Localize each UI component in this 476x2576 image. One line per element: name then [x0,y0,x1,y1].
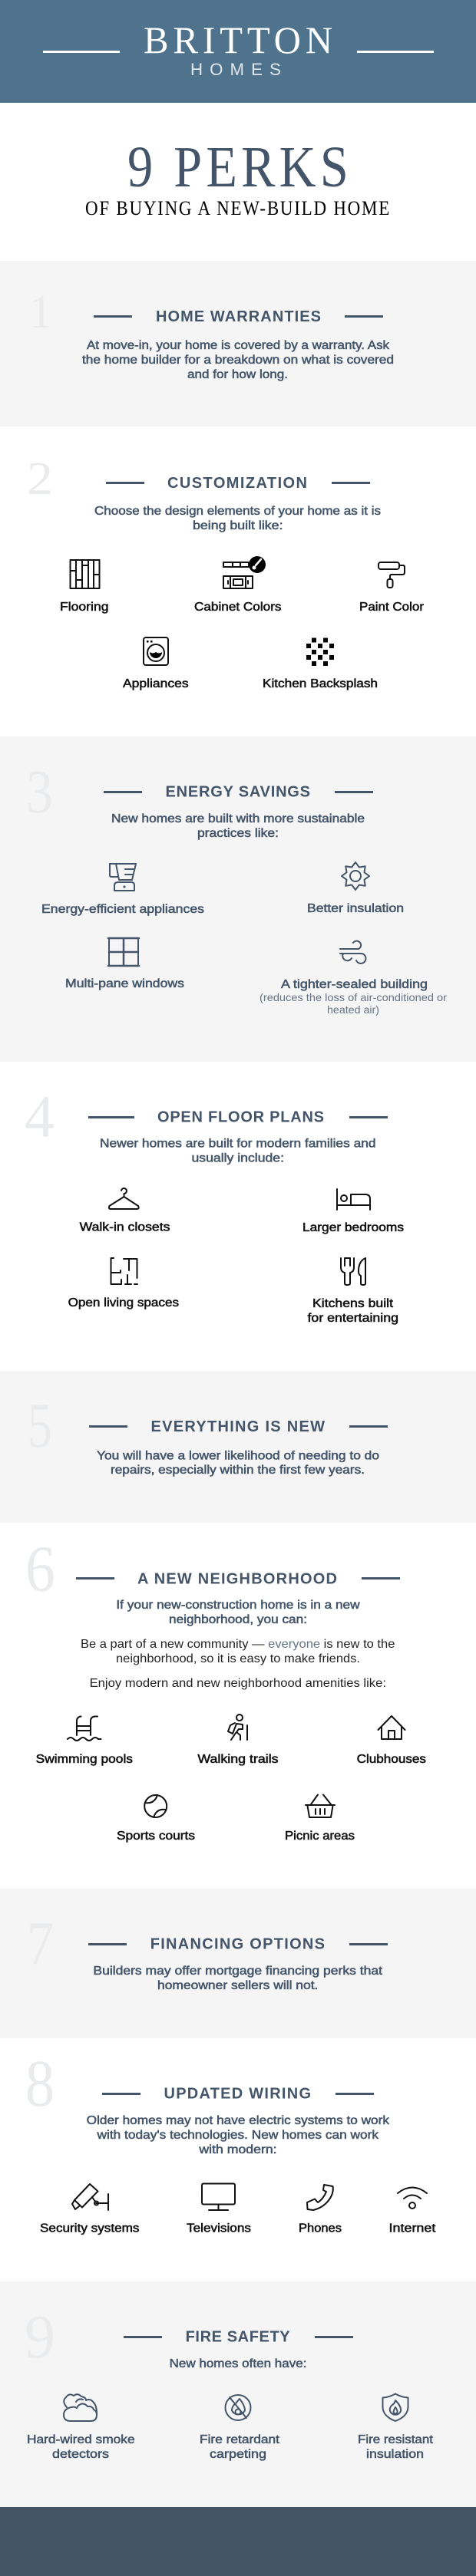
panel: 6 a new neighborhood: 6 [25,1532,55,1606]
icon: phone [307,2185,333,2210]
heading: FINANCING OPTIONS [150,1936,325,1953]
body text: If your new-construction home is in a new [116,1599,360,1612]
label: walk-in closets: Walk-in closets [80,1221,170,1234]
icon: swimming pool [68,1717,101,1741]
body text: New homes often have: [170,2357,306,2370]
body text [97,1449,379,1477]
icon: better insulation [342,862,369,890]
body text: New homes are built with more sustainable [111,812,365,825]
body text: usually include: [192,1152,284,1165]
heading: HOME WARRANTIES [156,308,321,325]
label: televisions: Televisions [187,2222,251,2235]
body text [87,2114,390,2156]
panel: 3 energy savings [0,736,476,1062]
heading: CUSTOMIZATION [167,475,307,492]
icon: hanger [109,1188,139,1209]
label: kitchen backsplash: Kitchen Backsplash [263,677,378,690]
icon: walking trails [228,1715,247,1740]
panel: 6 a new neighborhood [0,1523,476,1889]
label: open living spaces: Open living spaces [68,1296,179,1309]
heading: UPDATED WIRING [164,2085,311,2102]
label: fire retardant carpeting: Fire retardant [200,2433,280,2446]
body text: Newer homes are built for modern families and [100,1138,376,1151]
panel: 5 everything is new [0,1371,476,1523]
body text: neighborhood, you can: [169,1613,307,1626]
label: energy-efficient appliances: Energy-efficient appliances [41,903,204,916]
panel: 7 financing options [0,1889,476,2038]
body text [82,339,394,381]
heading: A NEW NEIGHBORHOOD [137,1571,337,1588]
body text [93,1965,383,1992]
label: sports courts: Sports courts [117,1830,195,1843]
body text: Builders may offer mortgage financing perks that [93,1965,383,1978]
body text: the home builder for a breakdown on what is covered [82,354,394,367]
heading: OPEN FLOOR PLANS [157,1109,324,1126]
icon: fire retardant carpet [226,2395,250,2420]
panel: 9 fire safety [0,2281,476,2507]
label: a tighter-sealed building: heated air) [327,1003,379,1016]
label: kitchens built for entertaining: for entertaining [307,1312,398,1325]
icon: flooring [71,560,100,588]
body text: with today's technologies. New homes can work [96,2129,379,2142]
amenities text: Enjoy modern and new neighborhood amenities like: [90,1677,386,1690]
panel: 8 updated wiring: 8 [25,2046,55,2120]
icon: energy-efficient appliance [110,864,136,891]
label: phones: Phones [299,2222,342,2235]
label: fire resistant insulation: insulation [366,2448,424,2461]
panel: 9 fire safety: 9 [25,2302,55,2371]
body text: Older homes may not have electric systems to work [87,2114,390,2127]
body text: practices like: [197,827,279,840]
panel: 4 open floor plans [0,1062,476,1371]
label: clubhouses: Clubhouses [357,1753,426,1766]
label: fire retardant carpeting: carpeting [210,2448,266,2461]
label: internet: Internet [388,2222,436,2235]
label: paint color: Paint Color [359,601,425,614]
icon: cutlery [341,1258,365,1285]
label: appliances: Appliances [123,677,189,690]
body text [100,1138,376,1165]
body text [116,1599,360,1626]
label: a tighter-sealed building [259,978,447,1016]
panel: 4 open floor plans: 4 [25,1083,55,1150]
title [85,135,391,219]
panel: 5 everything is new: 5 [28,1390,52,1461]
panel: 1 home warranties [0,261,476,427]
body text [94,505,381,532]
heading: ENERGY SAVINGS [166,784,310,801]
label: picnic areas: Picnic areas [285,1830,355,1843]
body text: You will have a lower likelihood of needing to do [97,1449,379,1462]
body text: being built like: [193,519,283,532]
label: hard-wired smoke detectors [27,2433,135,2461]
icon: kitchen backsplash [306,638,334,666]
panel: 7 financing options: 7 [27,1911,54,1978]
icon: cabinet colors [223,556,266,588]
body text: At move-in, your home is covered by a warranty. Ask [87,339,390,352]
label: kitchens built for entertaining [307,1297,398,1325]
label: multi-pane windows: Multi-pane windows [65,977,184,990]
label: larger bedrooms: Larger bedrooms [302,1221,404,1234]
icon: clubhouse [378,1716,405,1739]
community text: Be a part of a new community — everyone is new to the [81,1638,395,1651]
logo: Homes: HOMES [190,60,288,79]
label: fire resistant insulation: Fire resistant [358,2433,434,2446]
label: hard-wired smoke detectors: detectors [52,2448,109,2461]
icon: internet wifi [398,2188,427,2209]
label: a tighter-sealed building: (reduces the loss of air-conditioned or [259,991,447,1003]
label: walking trails: Walking trails [197,1753,279,1766]
header banner [0,0,476,103]
body text: and for how long. [187,368,288,381]
panel: 2 customization: 2 [27,453,53,505]
icon: security camera [72,2184,108,2210]
community text: neighborhood, so it is easy to make friends. [116,1652,360,1665]
panel: 8 updated wiring [0,2038,476,2281]
body text: Choose the design elements of your home as it is [94,505,381,518]
body text [111,812,365,840]
body text: homeowner sellers will not. [157,1979,318,1992]
label: fire retardant carpeting [200,2433,280,2461]
icon: paint roller [378,562,405,588]
label: better insulation: Better insulation [307,902,404,915]
icon: bed [337,1189,370,1210]
icon: open living space [111,1258,137,1284]
icon: smoke detector [64,2394,97,2421]
panel: 2 customization [0,427,476,736]
heading: EVERYTHING IS NEW [150,1418,325,1435]
panel: 1 home warranties: 1 [29,287,52,338]
panel: 3 energy savings: 3 [26,759,53,826]
label: security systems: Security systems [40,2222,140,2235]
icon: multi-pane window [108,938,139,966]
community text [81,1638,395,1665]
title: 9 PERKS [127,135,352,199]
icon: appliances [144,637,168,665]
label: cabinet colors: Cabinet Colors [194,601,281,614]
label: swimming pools: Swimming pools [36,1753,133,1766]
body text: repairs, especially within the first few years. [111,1464,365,1477]
label: a tighter-sealed building: A tighter-sealed building [281,978,428,991]
icon: fire resistant shield [382,2393,408,2421]
icon: wind [340,941,365,964]
label: kitchens built for entertaining: Kitchens built [312,1297,394,1310]
subtitle: OF BUYING A NEW-BUILD HOME [85,197,391,219]
icon: sports courts [144,1795,167,1817]
label: hard-wired smoke detectors: Hard-wired smoke [27,2433,135,2446]
label: flooring: Flooring [60,601,109,614]
icon: television [202,2183,235,2210]
body text: with modern: [198,2143,277,2156]
footer band [0,2507,476,2576]
logo: Britton: BRITTON [144,18,337,61]
label: fire resistant insulation [358,2433,434,2461]
heading: FIRE SAFETY [186,2329,290,2346]
icon: picnic basket [306,1795,335,1817]
